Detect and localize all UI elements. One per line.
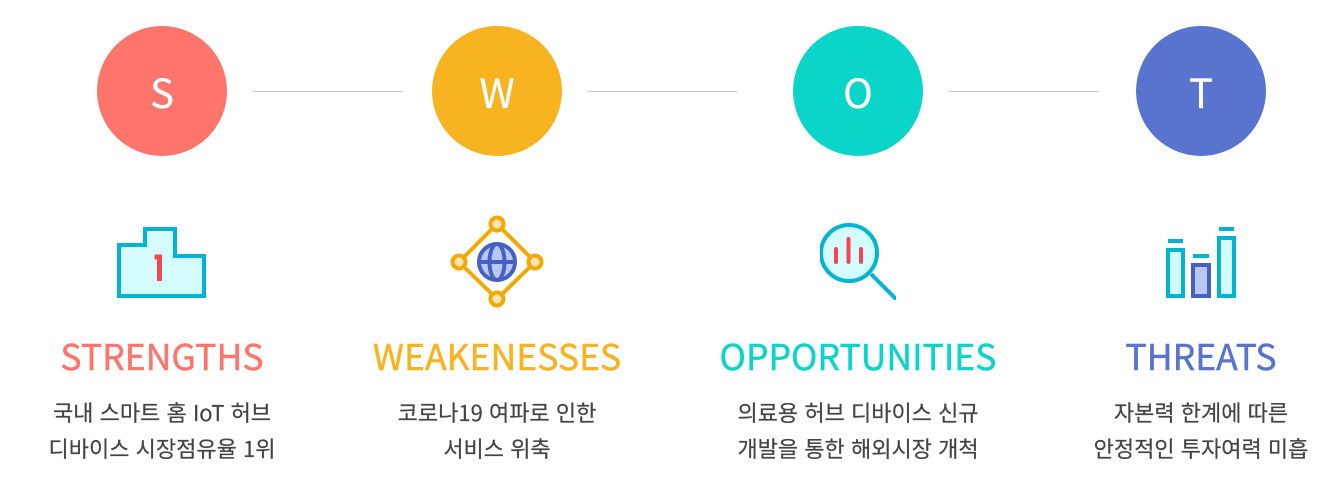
text: threats: 자본력 한계에 따른 xyxy=(1114,396,1288,428)
circle: T xyxy=(1136,26,1266,156)
text: strengths xyxy=(49,396,275,464)
heading: weakenesses: WEAKENESSES xyxy=(373,330,621,381)
circle: T: T xyxy=(1189,62,1213,120)
text: opportunities xyxy=(737,396,979,464)
text: strengths: 디바이스 시장점유율 1위 xyxy=(49,432,275,464)
text: weakenesses xyxy=(398,396,596,464)
text: weakenesses: 코로나19 여파로 인한 xyxy=(398,396,596,428)
text: strengths: 국내 스마트 홈 IoT 허브 xyxy=(53,396,271,428)
text: opportunities: 개발을 통한 해외시장 개척 xyxy=(737,432,979,464)
icon: podium xyxy=(119,229,204,296)
circle: O: O xyxy=(843,62,873,120)
circle: W xyxy=(432,26,562,156)
circle: W: W xyxy=(479,62,515,120)
circle: O xyxy=(793,26,923,156)
circle: S: S xyxy=(150,62,174,120)
icon: magnifier xyxy=(821,225,898,301)
text: weakenesses: 서비스 위축 xyxy=(443,432,551,464)
text: threats xyxy=(1094,396,1308,464)
icon: globe network xyxy=(452,218,542,306)
heading: opportunities: OPPORTUNITIES xyxy=(720,330,996,381)
heading: threats: THREATS xyxy=(1125,330,1277,381)
text: opportunities: 의료용 허브 디바이스 신규 xyxy=(737,396,979,428)
heading: strengths: STRENGTHS xyxy=(60,330,264,381)
text: threats: 안정적인 투자여력 미흡 xyxy=(1094,432,1308,464)
circle: S xyxy=(97,26,227,156)
icon: bar chart xyxy=(1168,227,1234,296)
